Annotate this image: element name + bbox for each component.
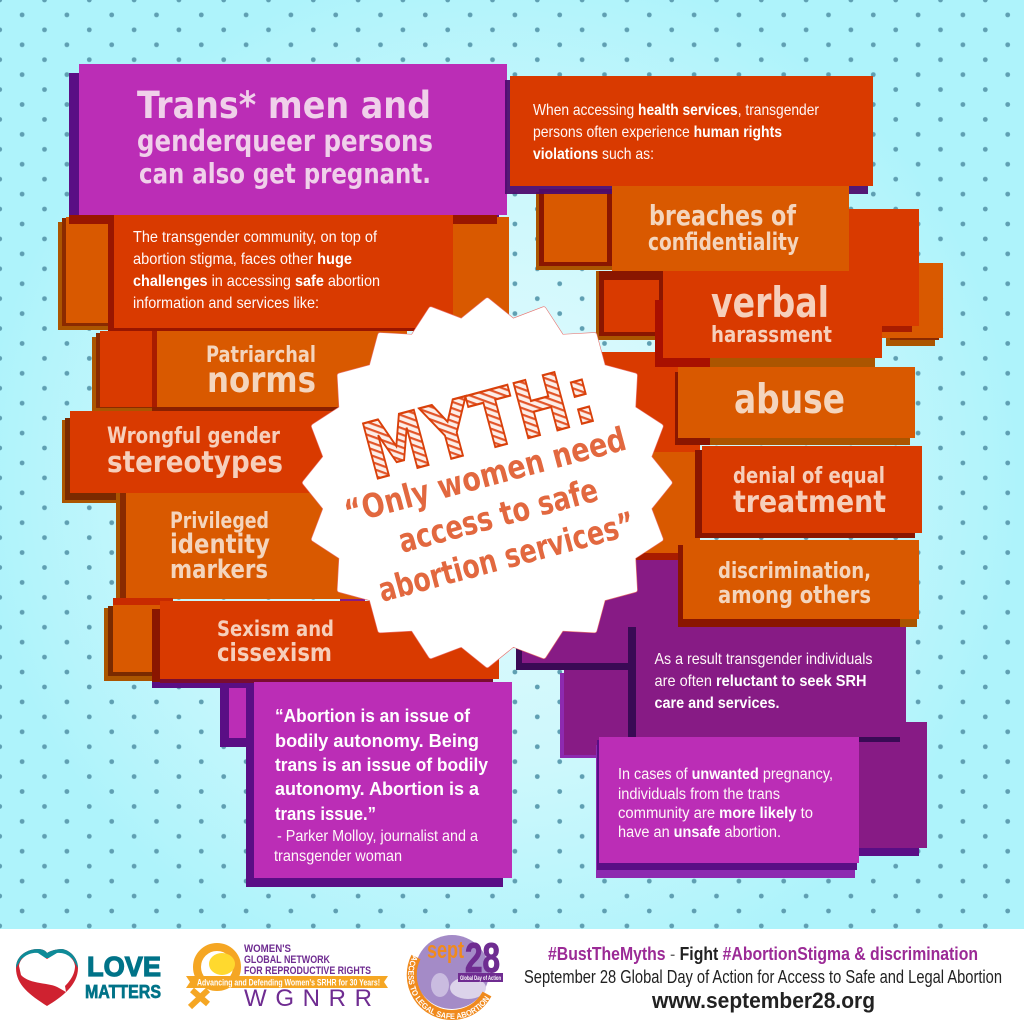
wordmark: love matters <box>85 951 161 1002</box>
text: arc slogan: ACCESS TO LEGAL SAFE ABORTION <box>408 955 490 1019</box>
hashtag line: #BustTheMyths - Fight #AbortionStigma & discrimination <box>548 944 978 964</box>
label: sexism and cissexism: Sexism and <box>217 617 334 641</box>
panel: verbal harassment <box>655 271 882 367</box>
text: challenges intro <box>133 229 380 312</box>
text: only women need access to safe abortion services <box>340 419 639 610</box>
text: organisation name: FOR REPRODUCTIVE RIGHTS <box>244 965 371 977</box>
text: challenges intro: The transgender community, on top of <box>133 229 377 246</box>
panel: back red block behind verbal <box>596 271 664 340</box>
label: wrongful gender stereotypes: Wrongful gender <box>107 424 280 449</box>
text: campaign footer <box>524 944 1002 1013</box>
heading: trans men and genderqueer persons <box>137 84 433 190</box>
text: only women need access to safe abortion services: access to safe <box>394 470 602 561</box>
text: organisation name: GLOBAL NETWORK <box>244 954 330 966</box>
text: reluctant to seek care <box>654 651 872 712</box>
panel: health services violations <box>505 76 873 194</box>
panel: transgender community challenges <box>58 215 509 331</box>
panel: abuse <box>675 367 915 445</box>
text: quote: trans is an issue of bodily <box>275 754 489 775</box>
panel: discrimination among others <box>678 540 919 627</box>
label: sexism and cissexism <box>217 617 334 667</box>
text: unsafe abortion <box>618 766 833 841</box>
label: privileged identity markers: Privileged <box>170 509 269 534</box>
text: unsafe abortion: individuals from the trans <box>618 786 780 803</box>
panel: denial of equal treatment <box>695 446 922 538</box>
label: privileged identity markers: markers <box>170 555 268 585</box>
text: quote <box>274 705 489 865</box>
heading: trans men and genderqueer persons: genderqueer persons <box>137 124 433 158</box>
logo: love matters <box>16 949 161 1006</box>
icon: globe ring and ribbon <box>186 947 388 1007</box>
label: patriarchal norms: Patriarchal <box>206 343 316 368</box>
label: sexism and cissexism: cissexism <box>217 638 332 667</box>
text: quote: - Parker Molloy, journalist and a <box>277 828 478 845</box>
label: verbal harassment: harassment <box>711 323 832 348</box>
label: abuse: abuse <box>734 375 845 423</box>
panel: quote backing <box>220 683 260 747</box>
label: denial of equal treatment: treatment <box>733 485 886 520</box>
heading: trans men and genderqueer persons: Trans* men and <box>137 84 431 127</box>
label: discrimination among others: among others <box>718 581 871 609</box>
label: breaches of confidentiality: confidentiality <box>648 228 799 256</box>
panel: back orange block behind breaches <box>536 189 620 270</box>
panel: breaches of confidentiality <box>612 186 849 271</box>
text: ribbon slogan: Advancing and Defending Women's SRHR for 30 Years! <box>197 978 380 988</box>
icon: heart speech bubble <box>16 949 78 1006</box>
text: reluctant to seek care: are often reluctant to seek SRH <box>654 673 866 690</box>
panel: red and orange backing behind the badge <box>540 352 700 560</box>
panel: right purple stack backing <box>516 560 927 856</box>
text: challenges intro: challenges in accessing safe abortion <box>133 273 380 290</box>
text: quote: “Abortion is an issue of <box>275 705 471 726</box>
panel: parker molloy quote <box>246 682 512 887</box>
text: reluctant to seek care: care and services. <box>654 695 780 712</box>
label: privileged identity markers <box>170 509 270 585</box>
text: health services: persons often experience human rights <box>533 124 782 141</box>
footer band <box>0 929 1024 1024</box>
text: health services: violations such as: <box>533 146 654 163</box>
label: verbal harassment <box>711 278 832 348</box>
text: wgnrr letters: W G N R R <box>244 985 372 1012</box>
panel: unsafe abortion <box>596 737 859 878</box>
heading: myth: MYTH: <box>354 350 605 498</box>
text: organisation name: WOMEN'S <box>244 943 291 955</box>
panel: headline <box>69 64 507 221</box>
badge: myth starburst <box>305 300 670 665</box>
panel: back blocks right of verbal harassment <box>840 209 943 346</box>
panel: sexism and cissexism <box>104 598 499 688</box>
icon: globe <box>415 935 489 1009</box>
logo: wgnrr <box>186 943 388 1012</box>
label: wrongful gender stereotypes: stereotypes <box>107 445 283 479</box>
icon: orange arc <box>412 957 487 1015</box>
panel: privileged identity markers <box>116 493 366 602</box>
logo: september 28 <box>406 934 503 1020</box>
text: only women need access to safe abortion services: “Only women need <box>340 419 630 532</box>
text: organisation name <box>244 943 371 977</box>
label: breaches of confidentiality: breaches of <box>649 199 797 232</box>
text: quote: bodily autonomy. Being <box>275 730 479 751</box>
label: patriarchal norms: norms <box>207 360 316 401</box>
label: breaches of confidentiality <box>648 199 799 256</box>
text: unsafe abortion: In cases of unwanted pregnancy, <box>618 766 833 783</box>
label: denial of equal treatment: denial of equal <box>733 464 885 489</box>
wordmark: love matters: LOVE <box>87 951 161 982</box>
panel: patriarchal norms <box>92 331 407 411</box>
text: quote: autonomy. Abortion is a <box>275 778 480 799</box>
text: sept: sept <box>427 937 464 964</box>
panel: wrongful gender stereotypes <box>62 411 370 503</box>
label: discrimination among others: discrimination, <box>718 559 871 584</box>
text: unsafe abortion: have an unsafe abortion. <box>618 824 781 841</box>
label: discrimination among others <box>718 559 871 609</box>
text: health services <box>533 102 820 163</box>
url: www.september28.org <box>651 988 875 1013</box>
text: only women need access to safe abortion services: abortion services” <box>374 504 639 610</box>
label: patriarchal norms <box>206 343 316 401</box>
label: verbal harassment: verbal <box>711 278 829 327</box>
guide path for arc slogan <box>408 955 491 1019</box>
text: health services: When accessing health services, transgender <box>533 102 820 119</box>
label: privileged identity markers: identity <box>170 529 270 560</box>
text: challenges intro: information and services like: <box>133 295 319 312</box>
panel: reluctant to seek care <box>628 627 906 742</box>
text: reluctant to seek care: As a result transgender individuals <box>654 651 872 668</box>
text: quote: transgender woman <box>274 848 402 865</box>
label: denial of equal treatment <box>733 464 886 520</box>
text: 28: 28 <box>465 934 500 981</box>
label: wrongful gender stereotypes <box>107 424 283 479</box>
text: quote: trans issue.” <box>275 803 376 824</box>
label: global day of action: Global Day of Action <box>460 976 501 982</box>
heading: trans men and genderqueer persons: can also get pregnant. <box>139 157 431 190</box>
wordmark: love matters: MATTERS <box>85 982 161 1002</box>
text: challenges intro: abortion stigma, faces other huge <box>133 251 352 268</box>
text: unsafe abortion: community are more likely to <box>618 805 813 822</box>
